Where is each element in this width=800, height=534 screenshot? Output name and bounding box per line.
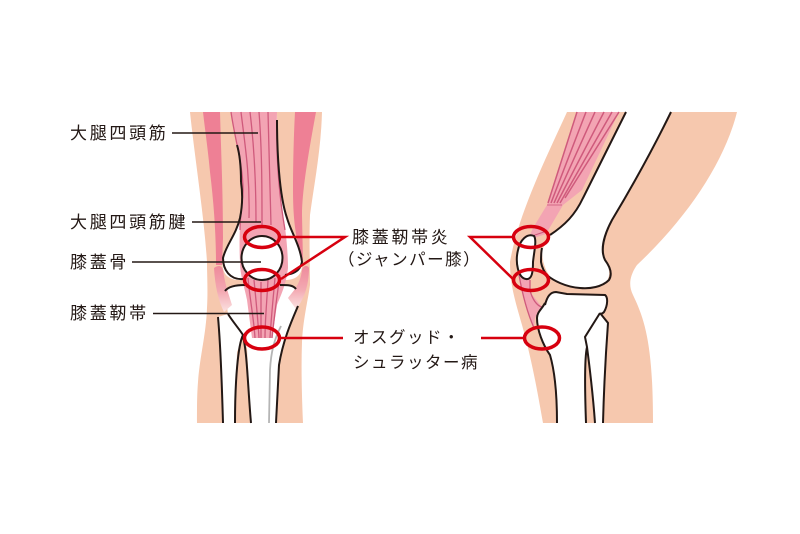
label: シュラッター病: シュラッター病 xyxy=(353,353,479,372)
patella xyxy=(242,236,282,280)
bone outlines: side view xyxy=(537,112,671,423)
tibia and fibula: white bones xyxy=(218,285,298,423)
side soft tissue: left xyxy=(214,266,232,312)
femur: white bone xyxy=(223,112,302,280)
femur: white bone xyxy=(542,112,671,288)
quadriceps muscle xyxy=(231,112,288,338)
label: オスグッド・: オスグッド・ xyxy=(353,328,461,347)
muscle: left vastus xyxy=(203,112,223,265)
skin: front leg xyxy=(190,112,322,423)
patella: side xyxy=(517,235,535,279)
skin: side leg xyxy=(510,112,737,423)
label: 膝蓋靭帯炎: 膝蓋靭帯炎 xyxy=(352,228,450,247)
label: 膝蓋靭帯: 膝蓋靭帯 xyxy=(70,304,149,323)
patellar tendon fibers xyxy=(248,275,280,338)
illustration: side view of knee xyxy=(510,112,737,423)
label: 大腿四頭筋: 大腿四頭筋 xyxy=(70,124,168,143)
bone outlines: front view xyxy=(218,120,302,423)
label: ジャンパー膝: （ジャンパー膝） xyxy=(338,250,481,269)
patellar tendon: side xyxy=(519,275,542,328)
tibia centre line xyxy=(269,326,281,423)
side soft tissue: right xyxy=(288,266,309,309)
fibula: white bone xyxy=(585,313,608,423)
red callouts: circled sites and connector lines xyxy=(244,226,560,349)
tibia: white bone xyxy=(537,292,607,423)
leader lines: anatomy labels xyxy=(132,133,264,314)
label: 膝蓋骨: 膝蓋骨 xyxy=(70,253,129,272)
label: 大腿四頭筋腱: 大腿四頭筋腱 xyxy=(70,213,188,232)
quadriceps muscle: side xyxy=(528,112,619,240)
illustration: front view of knee xyxy=(190,112,322,423)
muscle: right vastus xyxy=(293,112,316,262)
